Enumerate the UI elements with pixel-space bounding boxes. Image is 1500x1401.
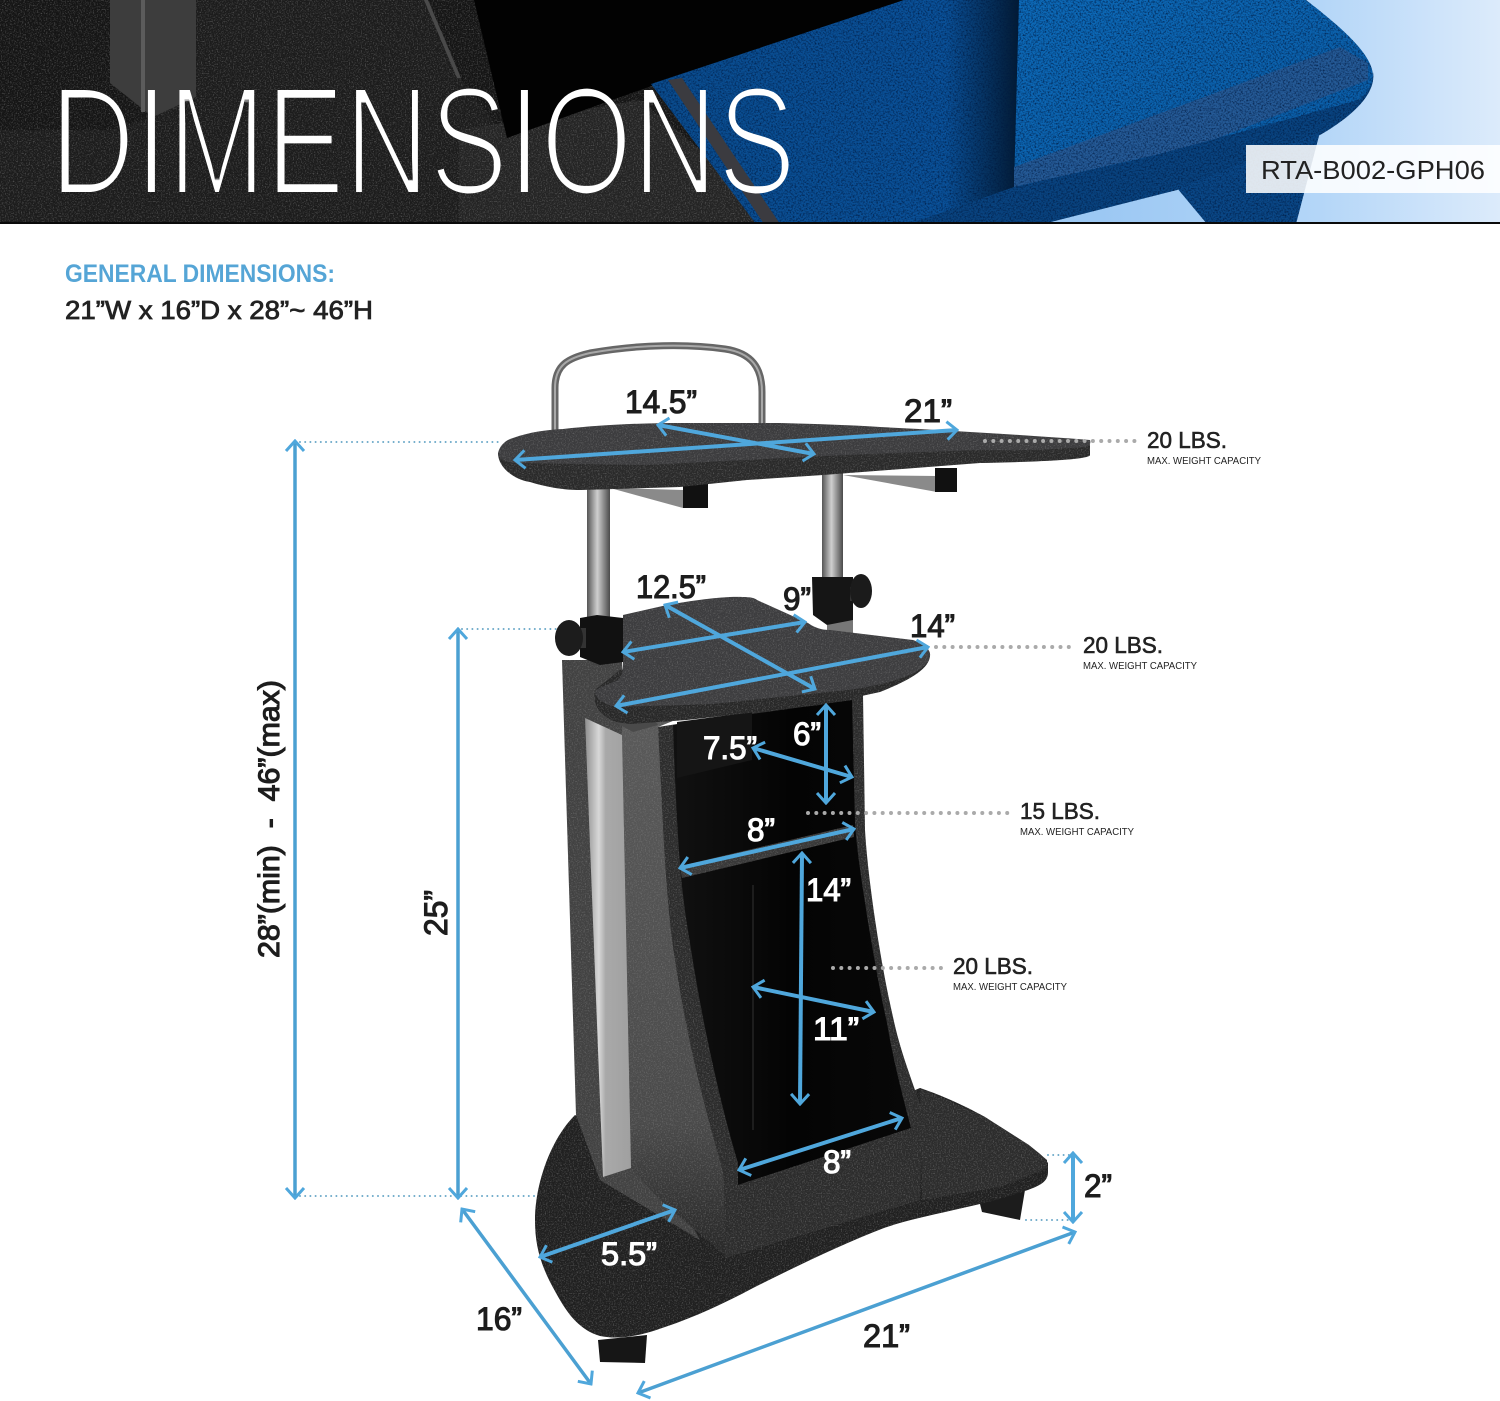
arrow: top desk depth <box>658 425 814 454</box>
dimension label: 6: 6” <box>793 716 821 752</box>
arrow: upper cubby depth <box>753 748 852 777</box>
arrow: mid shelf depth <box>665 605 815 689</box>
dimension label: 21 top: 21” <box>904 393 952 429</box>
callout: mid shelf capacity: 20 LBS. <box>1083 632 1163 658</box>
header banner <box>0 0 1500 224</box>
arrow: lower cubby height <box>800 853 802 1104</box>
arrow: mid shelf front width <box>616 647 928 706</box>
callout: top desk capacity <box>985 427 1261 467</box>
callout: top desk capacity: MAX. WEIGHT CAPACITY <box>1147 456 1261 467</box>
right clamp <box>812 574 872 648</box>
side panel and rail <box>562 660 730 1260</box>
handle <box>555 346 762 431</box>
left clamp <box>555 615 623 665</box>
callout: mid shelf capacity: MAX. WEIGHT CAPACITY <box>1083 661 1197 672</box>
dimension label: 14 shelf: 14” <box>910 608 955 644</box>
dimension label: 16: 16” <box>476 1301 522 1337</box>
casters <box>598 1190 1025 1363</box>
arrow: wheel height <box>1071 1153 1075 1222</box>
dimension label: 11: 11” <box>813 1011 859 1047</box>
callout: top desk capacity: 20 LBS. <box>1147 427 1227 453</box>
dimension label: 21 base: 21” <box>863 1318 910 1354</box>
callout: upper cubby capacity <box>808 798 1134 838</box>
arrow: base width <box>638 1232 1075 1393</box>
title: DIMENSIONS: DIMENSIONS <box>50 55 796 227</box>
front lip <box>725 1110 922 1258</box>
shelving interior <box>673 700 911 1185</box>
dimension label: 8 upper: 8” <box>747 812 775 848</box>
general dimensions text block <box>65 260 373 325</box>
dotted leader: blue reference lines <box>300 442 1072 1220</box>
arrow: mid shelf back width <box>623 622 805 652</box>
callout: mid shelf capacity <box>936 632 1197 672</box>
dimension label: 14.5: 14.5” <box>625 384 697 420</box>
arrow: lower cubby width <box>739 1118 902 1170</box>
arrow: top desk width <box>515 430 957 460</box>
arrow: overall height <box>293 441 297 1198</box>
callout: lower cubby capacity: 20 LBS. <box>953 953 1033 979</box>
callout: lower cubby capacity <box>833 953 1067 993</box>
dimension label: 7.5: 7.5” <box>703 730 757 766</box>
callout: lower cubby capacity: MAX. WEIGHT CAPACITY <box>953 982 1067 993</box>
callout: upper cubby capacity: MAX. WEIGHT CAPACITY <box>1020 827 1134 838</box>
top desk brackets <box>610 468 957 508</box>
arrow: base foot width <box>540 1210 675 1257</box>
arrow: lower height 25 in <box>456 629 460 1198</box>
height posts <box>587 470 843 620</box>
arrow: lower cubby depth <box>753 987 874 1012</box>
dimension label: 2: 2” <box>1084 1168 1112 1204</box>
dimension label: height range rotated: 28”(min) - 46”(max) <box>253 680 286 958</box>
arrow: upper cubby width <box>680 829 854 868</box>
general dimensions text block: GENERAL DIMENSIONS: <box>65 260 335 288</box>
model tag: RTA-B002-GPH06 <box>1261 155 1485 185</box>
base <box>535 1088 1048 1363</box>
dimension label: 25 rotated: 25” <box>418 890 454 936</box>
general dimensions text block: 21”W x 16”D x 28”~ 46”H <box>65 295 373 325</box>
arrow: base depth <box>462 1209 591 1384</box>
dimension label: 5.5: 5.5” <box>601 1236 657 1272</box>
middle shelf <box>594 597 930 732</box>
dimension label: 9: 9” <box>783 581 811 617</box>
dimension label: 12.5: 12.5” <box>636 569 706 605</box>
top desk <box>498 423 1090 490</box>
dimension label: 14 cubby: 14” <box>806 872 851 908</box>
callout: upper cubby capacity: 15 LBS. <box>1020 798 1100 824</box>
product: rolling lectern cart <box>498 346 1090 1363</box>
front frame <box>658 695 922 1258</box>
model tag <box>1246 145 1500 193</box>
arrow: upper cubby height <box>824 705 828 803</box>
dimension label: 8 lower: 8” <box>823 1144 851 1180</box>
